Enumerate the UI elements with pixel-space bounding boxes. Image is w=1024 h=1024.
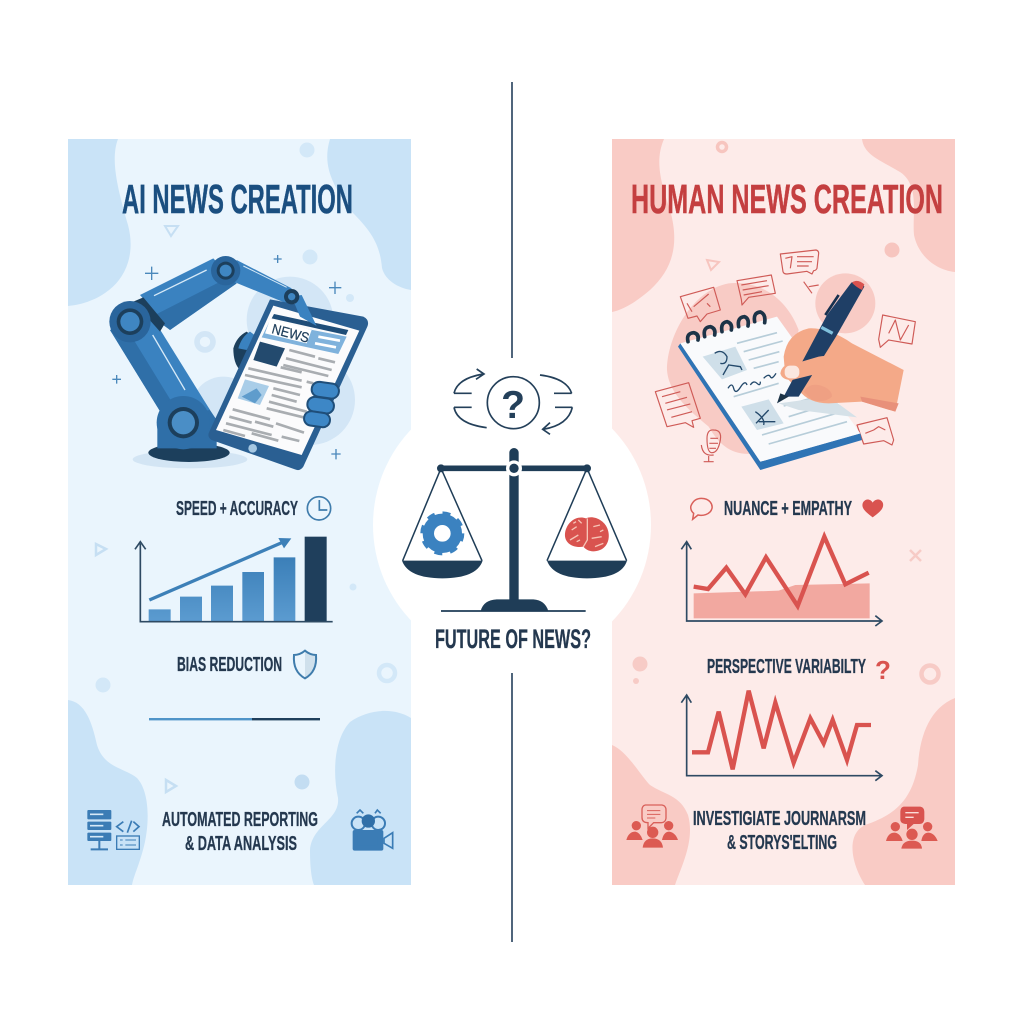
label: NEWS on tablet: NEWS — [270, 320, 311, 346]
icon: question mark with arrows — [454, 369, 572, 434]
center divider bottom — [511, 673, 513, 942]
label: perspective variability: PERSPECTIVE VARIABILTY — [707, 656, 866, 678]
icon: heart — [862, 499, 883, 517]
icon: people with speech bubble left — [626, 805, 678, 848]
icon: camera and people — [352, 810, 393, 851]
icon: clock — [307, 497, 331, 520]
icon: speech bubble — [691, 498, 712, 519]
panel: AI background — [68, 139, 411, 885]
bar chart: speed and accuracy — [135, 537, 333, 622]
icon: servers and code — [87, 810, 139, 849]
label: speed and accuracy: SPEED + ACCURACY — [176, 497, 298, 520]
label: future of news: FUTURE OF NEWS? — [435, 624, 591, 654]
line chart: nuance and empathy — [681, 537, 882, 626]
label: nuance and empathy: NUANCE + EMPATHY — [724, 497, 852, 520]
label: investigative journalism and storytelling: INVESTIGIATE JOURNARSM — [693, 808, 866, 830]
icon: shield — [294, 651, 316, 678]
icon: red question mark: ? — [875, 655, 891, 685]
panel: Human background — [612, 139, 955, 885]
label: automated reporting and data analysis: & DATA ANALYSIS — [185, 833, 297, 855]
icon text: question mark: ? — [501, 384, 525, 427]
label: investigative journalism and storytelling — [693, 808, 866, 854]
label: bias reduction: BIAS REDUCTION — [177, 654, 282, 676]
icon: gear — [424, 515, 461, 552]
center white circle — [373, 386, 651, 664]
label: automated reporting and data analysis — [162, 809, 318, 855]
label: investigative journalism and storytelling: & STORYS'ELTING — [727, 832, 837, 854]
icon: people with speech bubble right — [886, 807, 938, 849]
label: automated reporting and data analysis: AUTOMATED REPORTING — [162, 809, 318, 831]
illustration: robot arm with tablet — [109, 255, 368, 470]
center divider top — [511, 82, 513, 358]
illustration: hand writing in notebook — [655, 250, 915, 470]
icon: brain — [565, 517, 609, 551]
heading: AI news creation: AI NEWS CREATION — [122, 176, 353, 222]
line chart: perspective variability — [681, 691, 882, 781]
progress bar: bias reduction — [149, 718, 320, 720]
illustration: balance scale — [402, 453, 627, 611]
